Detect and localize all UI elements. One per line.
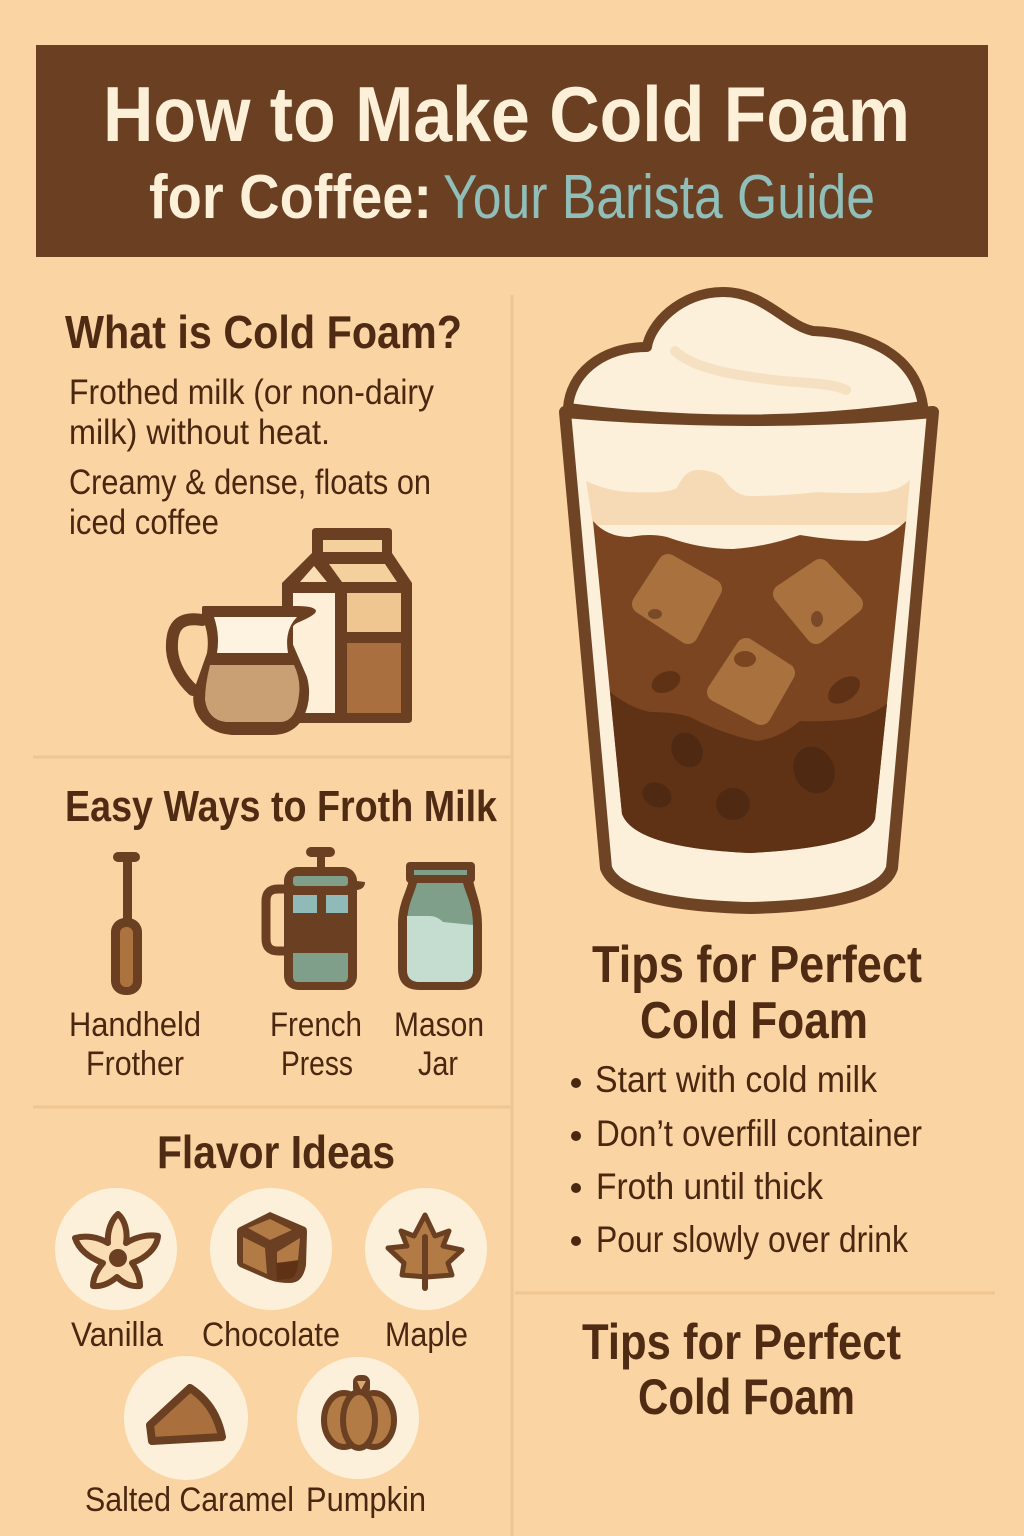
icon: mason jar xyxy=(398,862,482,990)
icon: vanilla flower xyxy=(55,1188,177,1310)
label: french press xyxy=(270,1006,362,1083)
illustration: iced coffee with cold foam xyxy=(565,292,933,908)
heading: tips xyxy=(592,936,922,1050)
tips list: Pour slowly over drink xyxy=(596,1219,908,1260)
icon: maple leaf xyxy=(365,1188,487,1310)
heading: repeated tips xyxy=(582,1314,901,1425)
label: french press: Press xyxy=(281,1045,353,1083)
heading: flavor ideas: Flavor Ideas xyxy=(157,1126,395,1178)
icon: milk carton and pitcher xyxy=(172,528,412,735)
label: salted caramel: Salted Caramel xyxy=(85,1481,294,1519)
heading: repeated tips: Tips for Perfect xyxy=(582,1314,901,1370)
panel: tips for perfect cold foam xyxy=(571,936,922,1260)
description text: milk) without heat. xyxy=(69,413,330,452)
ice specks and coffee beans xyxy=(638,609,865,820)
label: handheld frother: Handheld xyxy=(69,1006,201,1044)
tips list xyxy=(571,1059,922,1260)
tips list: Start with cold milk xyxy=(595,1059,877,1100)
title line 2: for Coffee: xyxy=(149,163,432,232)
panel: easy ways to froth milk xyxy=(65,782,497,1083)
label: chocolate: Chocolate xyxy=(202,1316,340,1354)
glass body xyxy=(565,412,933,908)
tips list: Don’t overfill container xyxy=(596,1113,922,1154)
heading: tips: Tips for Perfect xyxy=(592,936,922,994)
heading: what is cold foam: What is Cold Foam? xyxy=(65,306,462,358)
label: mason jar: Jar xyxy=(418,1045,458,1083)
label: handheld frother: Frother xyxy=(86,1045,184,1083)
heading: repeated tips: Cold Foam xyxy=(638,1369,855,1425)
dark coffee layer xyxy=(610,692,887,853)
tips list: Froth until thick xyxy=(596,1166,823,1207)
label: handheld frother xyxy=(69,1006,201,1083)
description text xyxy=(69,373,434,542)
label: french press: French xyxy=(270,1006,362,1044)
description text: iced coffee xyxy=(69,503,219,542)
foam dome xyxy=(568,292,923,420)
foam highlight xyxy=(675,351,846,390)
label: mason jar: Mason xyxy=(394,1006,484,1044)
icon: chocolate cube xyxy=(210,1188,332,1310)
description text: Frothed milk (or non-dairy xyxy=(69,373,434,412)
heading: easy ways: Easy Ways to Froth Milk xyxy=(65,782,497,831)
icon: french press xyxy=(266,847,365,990)
label: maple: Maple xyxy=(385,1316,468,1354)
title line 1: How to Make Cold Foam xyxy=(103,70,910,158)
ice cube 3 xyxy=(717,648,785,715)
foam layer in glass xyxy=(586,470,910,525)
label: mason jar xyxy=(394,1006,484,1083)
title banner xyxy=(36,45,988,257)
title accent: Your Barista Guide xyxy=(443,163,875,232)
icon: pumpkin xyxy=(297,1357,419,1479)
label: vanilla: Vanilla xyxy=(71,1316,163,1354)
description text: Creamy & dense, floats on xyxy=(69,463,431,502)
icon: salted caramel xyxy=(124,1356,248,1480)
coffee xyxy=(593,521,906,853)
panel: flavor ideas xyxy=(55,1126,487,1519)
label: pumpkin: Pumpkin xyxy=(306,1481,426,1519)
ice cube 1 xyxy=(642,564,712,634)
heading: tips: Cold Foam xyxy=(640,992,868,1050)
panel: what is cold foam xyxy=(65,306,462,735)
ice cube 2 xyxy=(783,569,853,634)
icon: handheld frother xyxy=(111,852,142,995)
